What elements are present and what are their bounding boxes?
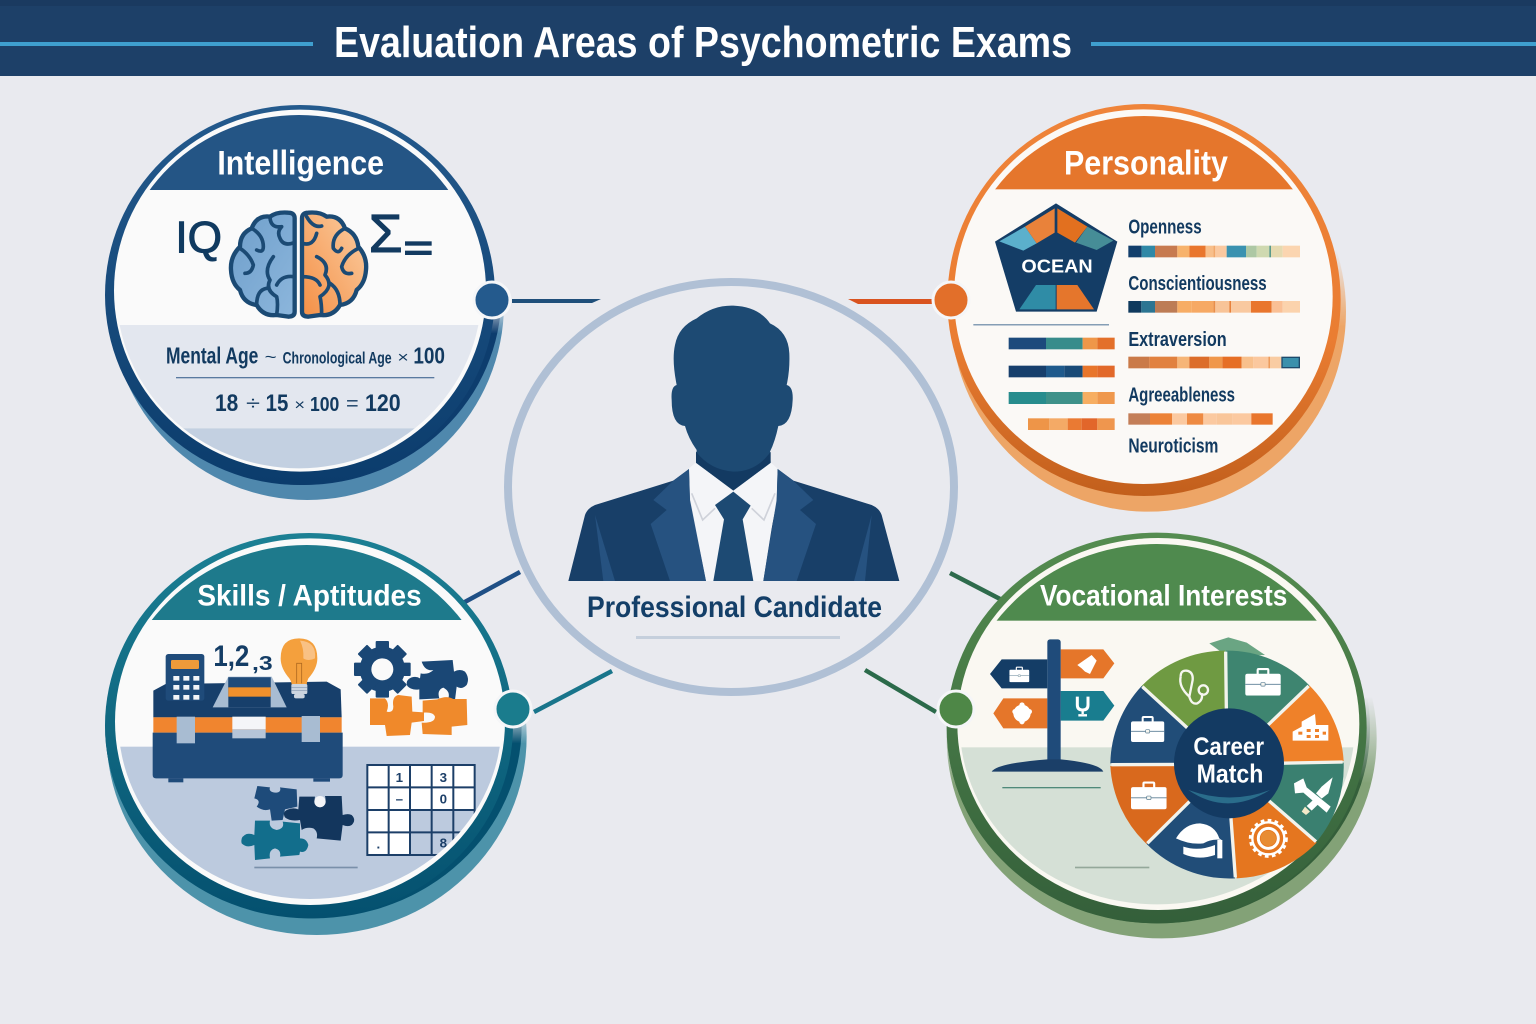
icon: candidate silhouette (568, 306, 899, 581)
connector dot: vocational (938, 691, 974, 727)
IQ formula: Chronological Age (283, 348, 392, 367)
panel: intelligence (100, 100, 520, 500)
heading: intelligence (150, 115, 448, 190)
icon: signpost (990, 639, 1114, 772)
IQ worked example: ÷ (246, 393, 260, 414)
icon: toolbox (153, 654, 343, 782)
connector: vocational to candidate upper (950, 573, 1002, 600)
connector: skills to candidate lower (534, 671, 612, 712)
title: Evaluation Areas of Psychometric Exams (334, 18, 1072, 67)
icon: puzzle pieces top (370, 660, 468, 736)
heading: personality (995, 116, 1293, 190)
IQ worked example: 100 (310, 393, 339, 416)
lower band (120, 746, 500, 899)
sigma and equals symbols: Σ (369, 205, 403, 264)
trait: agreeableness: Agreeableness (1128, 385, 1235, 407)
connector dot: intelligence (474, 282, 510, 318)
connector dot: personality (933, 282, 969, 318)
icon: sudoku grid: 1 (396, 770, 404, 785)
panel: personality (940, 100, 1360, 512)
IQ formula (166, 342, 445, 368)
center label: career match (1174, 708, 1284, 818)
heading: skills / aptitudes (152, 545, 462, 620)
panel: vocational interests (940, 530, 1380, 938)
numbers 1,2,3: 1,2 (213, 640, 249, 673)
icon: calculator (166, 654, 204, 701)
connector: personality to candidate (848, 299, 932, 304)
connector: vocational to candidate lower (865, 670, 936, 712)
left score bars (1009, 338, 1115, 430)
connector: intelligence to candidate (512, 299, 601, 303)
panel: skills and aptitudes (100, 530, 530, 935)
icon: briefcases (1131, 668, 1281, 809)
trait: openness (1128, 216, 1300, 257)
IQ worked example (215, 390, 401, 417)
candidate label: Professional Candidate (587, 591, 882, 624)
icon: sudoku grid (367, 765, 475, 855)
IQ formula: Mental Age (166, 342, 258, 368)
connector dot: skills (495, 691, 531, 727)
icon: wrench and screwdriver (1294, 777, 1333, 815)
trait: agreeableness (1128, 385, 1273, 425)
IQ formula: × (397, 350, 409, 367)
title banner (0, 0, 1536, 76)
trait: extraversion: Extraversion (1128, 329, 1227, 351)
IQ worked example: = (346, 394, 359, 415)
icon: OCEAN pentagon: OCEAN (1021, 256, 1093, 277)
connector: skills to candidate upper (463, 572, 520, 603)
lower band (962, 747, 1354, 904)
icon: sudoku grid: 8 (440, 836, 447, 851)
icon: stethoscope (1180, 671, 1208, 704)
numbers 1,2,3: ,3 (252, 652, 273, 675)
IQ formula: 100 (413, 342, 445, 368)
heading: personality: Personality (1064, 145, 1228, 183)
heading: vocational interests: Vocational Interests (1040, 579, 1287, 612)
icon: light bulb (281, 638, 317, 698)
center label: career match: Match (1197, 759, 1263, 789)
trait: conscientiousness (1128, 273, 1300, 313)
IQ worked example: × (294, 397, 305, 414)
IQ worked example: 120 (365, 390, 401, 417)
center ring (508, 282, 954, 692)
IQ worked example: 15 (266, 390, 288, 417)
formula band (120, 325, 478, 468)
heading: skills / aptitudes: Skills / Aptitudes (197, 579, 422, 612)
icon: sudoku grid: . (376, 836, 380, 851)
icon: gear (354, 641, 411, 698)
trait: openness: Openness (1128, 216, 1202, 238)
trait: conscientiousness: Conscientiousness (1128, 273, 1267, 295)
icon: sudoku grid: 3 (440, 770, 447, 785)
icon: sudoku grid: – (396, 791, 403, 806)
icon: gear ring (1250, 820, 1286, 856)
icon: brain (231, 212, 366, 317)
IQ worked example: 18 (215, 390, 238, 417)
icon: building (1293, 714, 1328, 741)
icon: puzzle pieces bottom (241, 786, 354, 860)
icon: graduation cap (1176, 823, 1222, 858)
heading: vocational interests (996, 544, 1317, 621)
trait: extraversion (1128, 329, 1300, 368)
icon: career wheel (1110, 637, 1344, 878)
central panel: professional candidate (508, 282, 954, 692)
trait: neuroticism: Neuroticism (1128, 436, 1218, 458)
center label: career match: Career (1193, 733, 1264, 761)
icon: sudoku grid: 0 (440, 791, 447, 806)
IQ formula: ~ (265, 348, 277, 367)
numbers 1,2,3 (213, 640, 273, 675)
icon: OCEAN pentagon (995, 203, 1117, 312)
IQ label: IQ (175, 214, 222, 263)
heading: intelligence: Intelligence (217, 145, 384, 183)
